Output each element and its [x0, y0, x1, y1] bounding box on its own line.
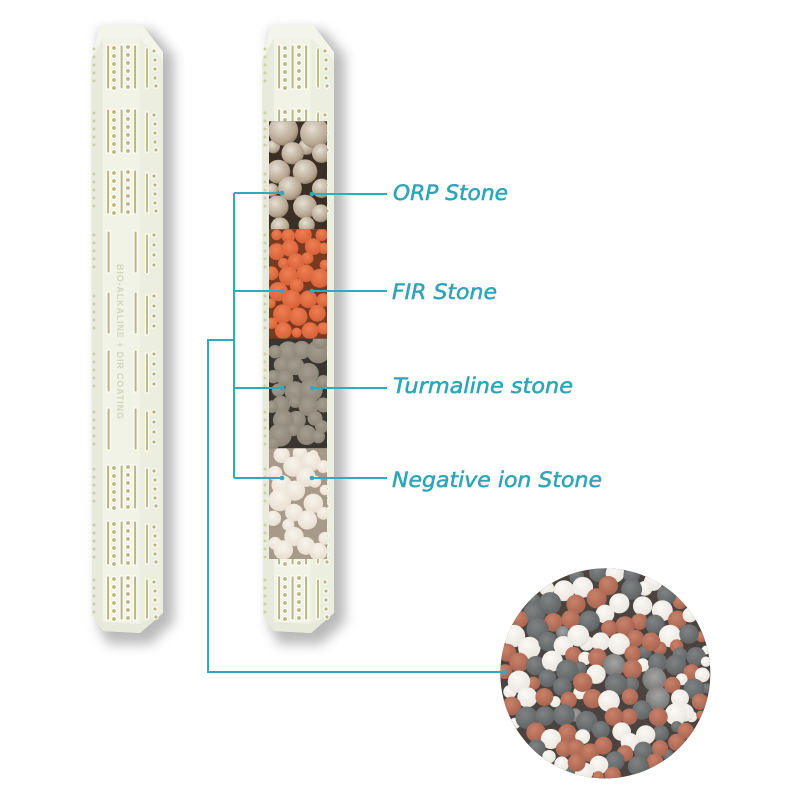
stone window: [269, 121, 327, 559]
moulded lettering on cartridge: BIO-ALKALINE + DIR COATING: [115, 264, 125, 419]
bracket connector lines: [234, 191, 284, 480]
label: Turmaline stone: Turmaline stone: [393, 374, 573, 398]
ORP stone layer: [269, 121, 327, 230]
leader line to mixed stones photo: [208, 340, 507, 674]
Turmaline stone layer: [269, 338, 327, 448]
mixed stones circular photo: [498, 563, 712, 783]
cartridge body: [262, 25, 345, 644]
filter cartridge, closed: [91, 25, 174, 644]
leader lines to labels: [310, 192, 387, 480]
label: Negative ion Stone: Negative ion Stone: [392, 468, 602, 492]
filter cartridge, cut-away: [262, 25, 345, 644]
label: ORP Stone: ORP Stone: [393, 181, 508, 205]
label: FIR Stone: FIR Stone: [392, 280, 497, 304]
Negative ion stone layer: [269, 448, 327, 559]
FIR stone layer: [269, 229, 327, 339]
